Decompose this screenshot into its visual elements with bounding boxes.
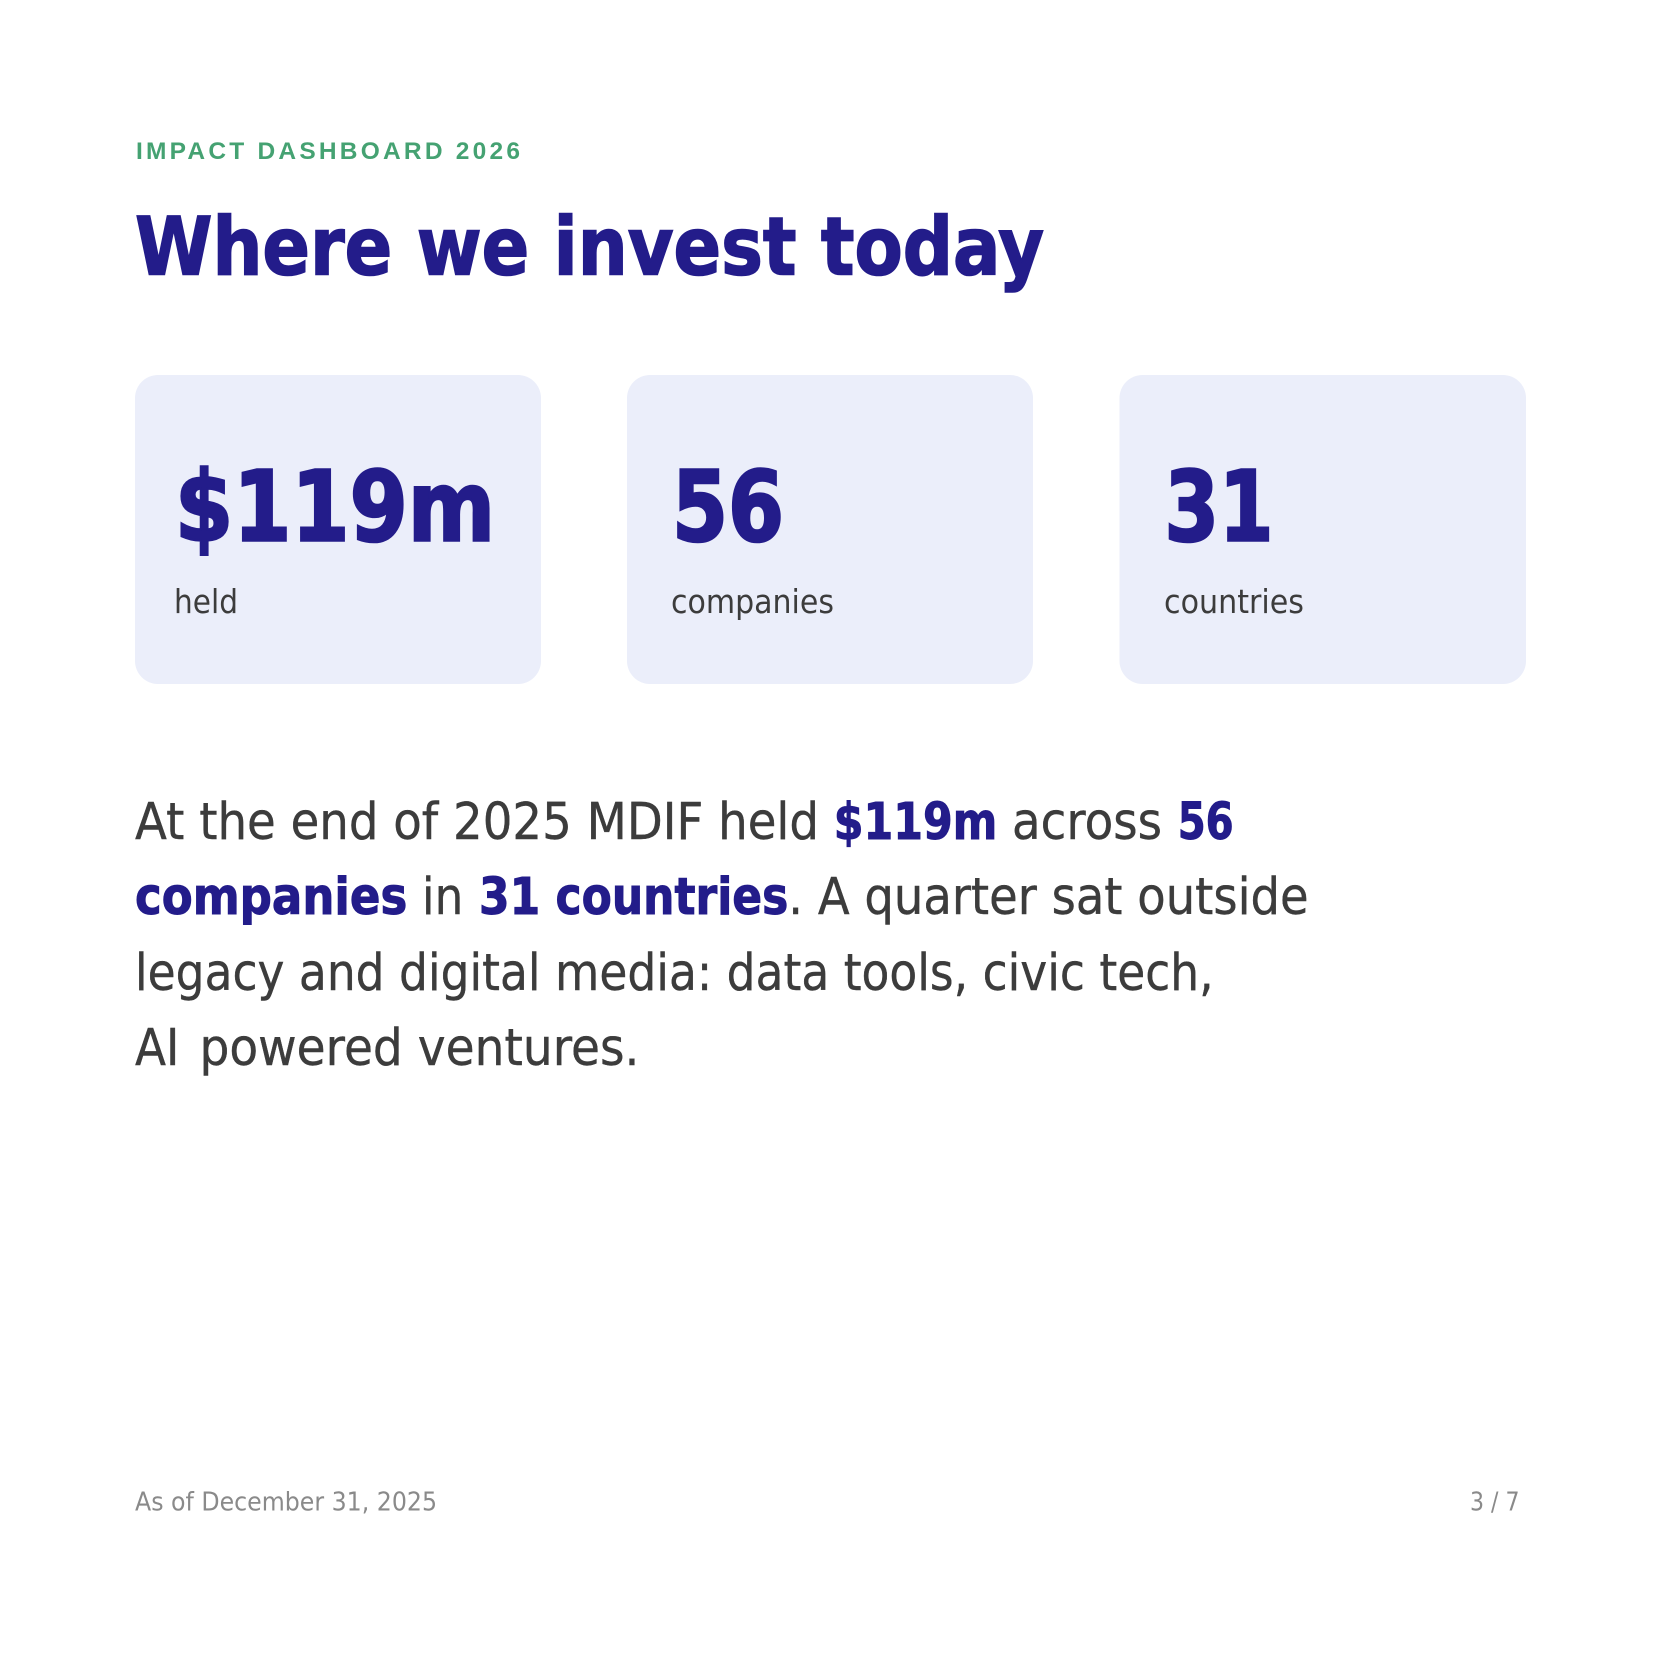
panel: held [135, 375, 541, 684]
body paragraph: powered ventures. [200, 1019, 640, 1078]
eyebrow label: IMPACT DASHBOARD 2026 [136, 138, 520, 165]
stat label: held: held [174, 583, 238, 621]
stat value: 31: 31 [1164, 450, 1274, 564]
body paragraph: AI [135, 1019, 179, 1078]
panel: countries [1120, 375, 1526, 684]
body paragraph: . A quarter sat outside [788, 868, 1309, 927]
body paragraph: across [1012, 793, 1162, 852]
stat label: companies: companies [671, 583, 834, 621]
title: Where we invest today [135, 200, 1044, 293]
body paragraph: legacy and digital media: data tools, civic tech, [135, 944, 1214, 1003]
stat value: $119m: $119m [175, 450, 495, 564]
stat value: 56: 56 [672, 450, 784, 564]
body paragraph: companies [135, 868, 407, 927]
body paragraph: 31 countries [479, 868, 788, 927]
stat label: countries: countries [1164, 583, 1304, 621]
body paragraph [135, 793, 1309, 1078]
footer: date: As of December 31, 2025 [135, 1488, 437, 1518]
footer: page number: 3 / 7 [1470, 1488, 1520, 1518]
body paragraph: 56 [1178, 793, 1234, 852]
panel: companies [627, 375, 1033, 684]
body paragraph: $119m [834, 793, 997, 852]
body paragraph: At the end of 2025 MDIF held [135, 793, 819, 852]
body paragraph: in [422, 868, 463, 927]
